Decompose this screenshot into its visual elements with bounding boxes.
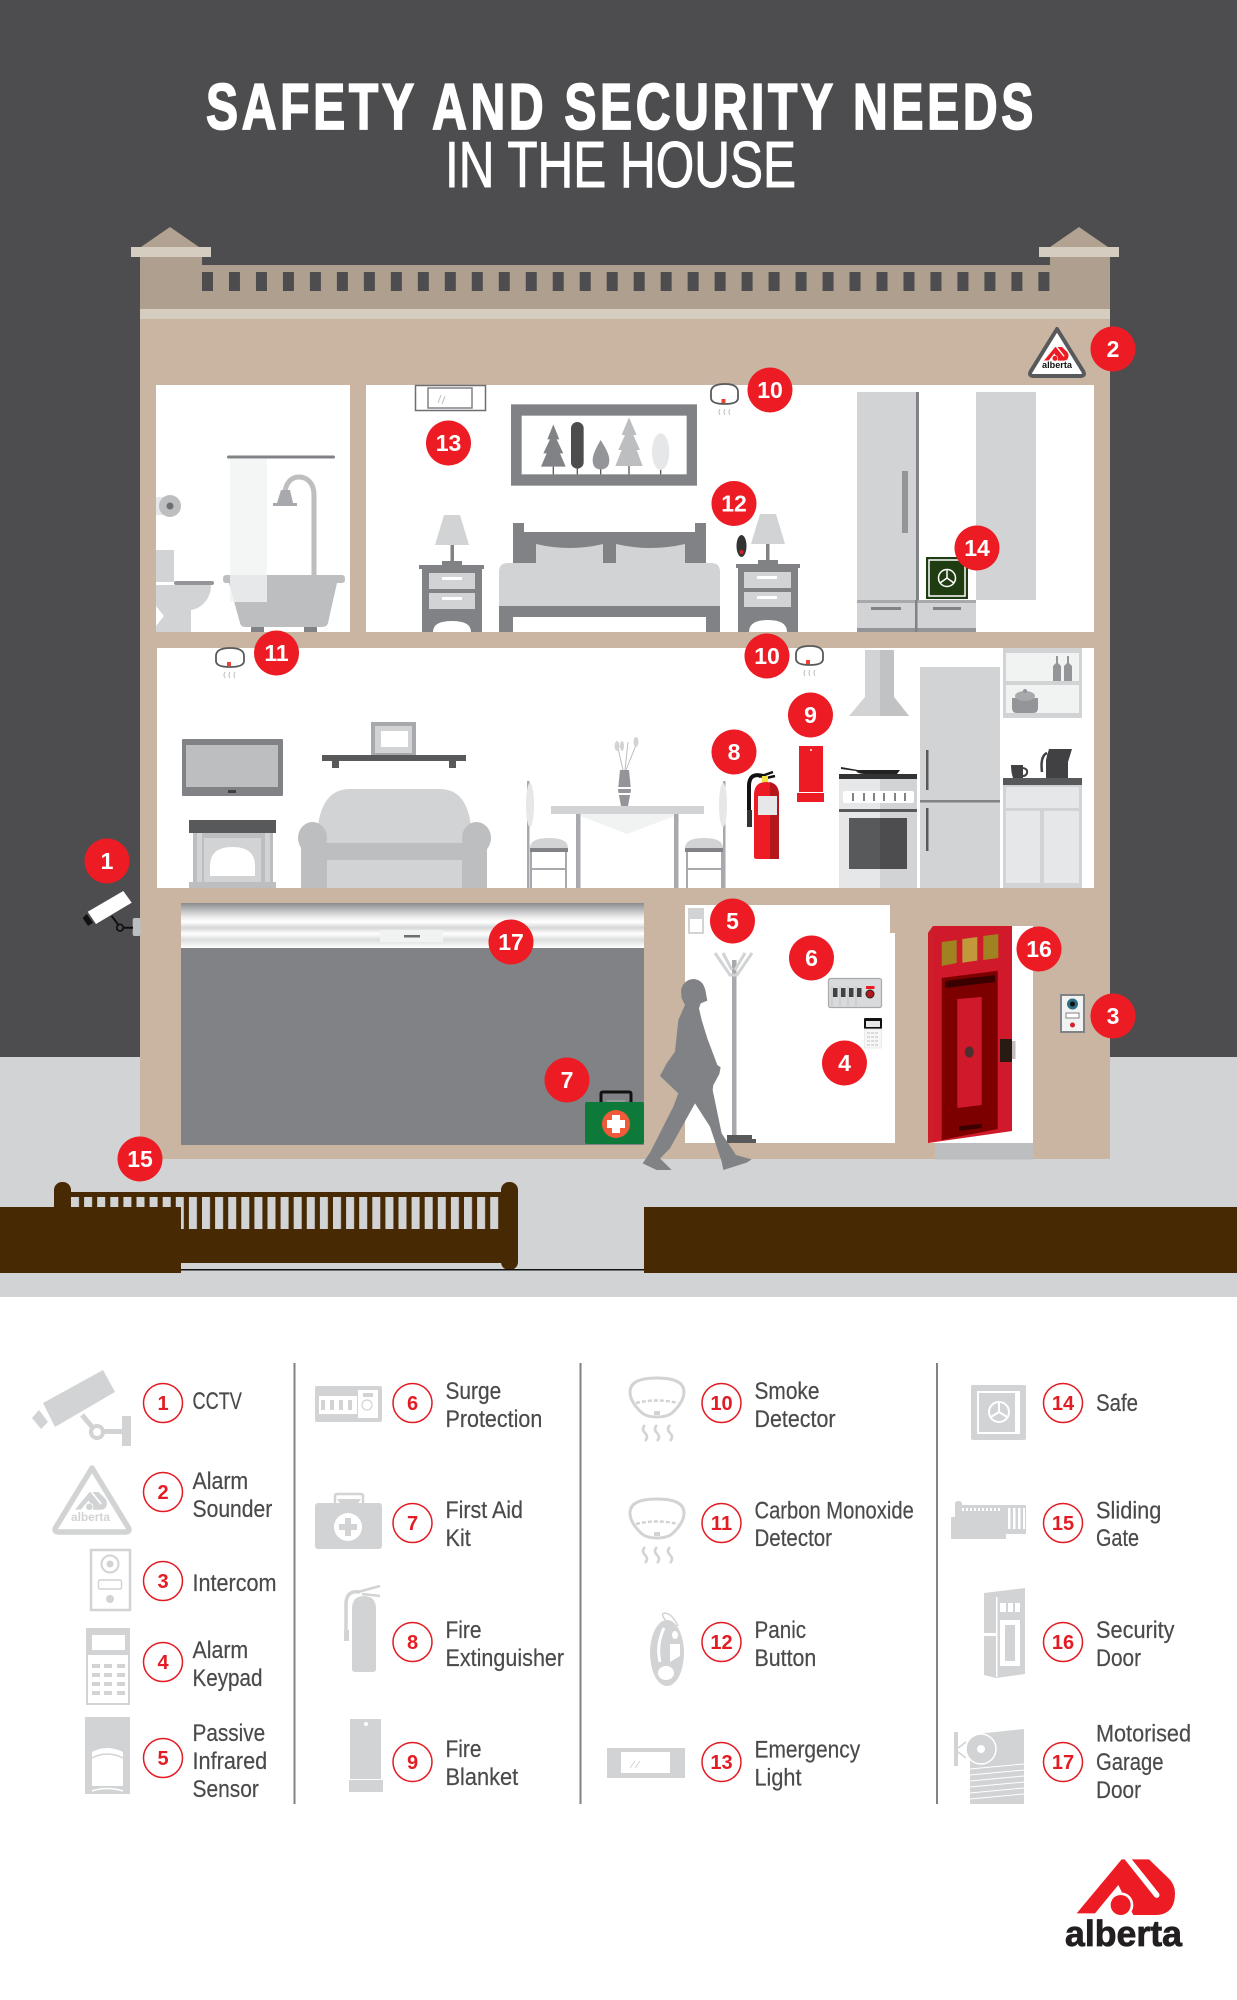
painting <box>511 404 697 486</box>
legend icon: garage door <box>954 1729 1024 1804</box>
legend item 11: Carbon Monoxide Detector: Carbon Monoxide <box>754 1498 914 1524</box>
legend item 17: Motorised Garage Door: Garage <box>1096 1749 1164 1776</box>
icon: toilet <box>156 550 214 632</box>
legend icon: fire blanket <box>349 1719 383 1792</box>
legend icon: smoke detector <box>630 1378 684 1441</box>
dining chair right <box>685 781 727 888</box>
refrigerator <box>920 667 1000 888</box>
panel: living room and kitchen <box>157 646 1094 888</box>
icon: shower <box>273 477 314 576</box>
legend item 13: Emergency Light <box>607 1736 861 1792</box>
icon: surge protection panel <box>828 978 882 1008</box>
legend item 12: Panic Button: 12 <box>710 1632 733 1654</box>
legend icon: PIR sensor <box>85 1717 130 1794</box>
legend icon: panic button <box>650 1613 684 1686</box>
icon: smoke detector living <box>796 646 823 676</box>
icon: security door <box>928 926 1016 1143</box>
legend item 10: Smoke Detector: 10 <box>710 1393 733 1415</box>
legend item 16: Security Door: Security <box>1096 1617 1175 1644</box>
stove and pan <box>839 767 917 888</box>
numbered marker 8 <box>712 730 756 774</box>
numbered marker 10 bedroom: 10 <box>757 377 783 403</box>
icon: safe <box>926 557 968 599</box>
legend item 2: Alarm Sounder <box>55 1468 272 1532</box>
fireplace <box>189 820 276 888</box>
background: ground <box>0 1057 1237 1297</box>
legend item 5: Passive Infrared Sensor: Sensor <box>192 1776 259 1803</box>
icon: emergency light <box>416 386 486 410</box>
numbered marker 14 <box>954 526 1000 570</box>
numbered marker 11 <box>254 630 299 676</box>
icon: bathtub and curtain <box>223 456 345 632</box>
panel: bedroom <box>366 384 1094 632</box>
legend item 11: Carbon Monoxide Detector: Detector <box>754 1525 832 1552</box>
legend item 5: Passive Infrared Sensor: 5 <box>157 1748 169 1770</box>
shelf with photo frame <box>322 722 466 768</box>
legend item 14: Safe: 14 <box>1052 1393 1075 1415</box>
icon: toilet paper <box>156 495 181 517</box>
dining table with vase <box>551 737 704 888</box>
nightstand and lamp left <box>419 515 484 632</box>
legend item 5: Passive Infrared Sensor: Passive <box>192 1720 265 1747</box>
numbered marker 17: 17 <box>498 929 524 955</box>
icon: smoke detector bedroom <box>711 384 738 415</box>
range hood <box>849 650 909 716</box>
numbered marker 10 living room: 10 <box>754 643 780 669</box>
numbered marker 6: 6 <box>805 945 818 971</box>
icon: alarm keypad <box>864 1018 882 1048</box>
legend item 9: Fire Blanket: Fire <box>446 1736 482 1763</box>
legend item 6: Surge Protection: 6 <box>407 1393 418 1415</box>
house structure <box>131 227 1119 1159</box>
numbered marker 8: 8 <box>728 739 741 765</box>
numbered marker 9 <box>788 692 833 738</box>
numbered marker 4 <box>822 1040 867 1086</box>
numbered marker 17 <box>488 920 534 964</box>
legend item 8: Fire Extinguisher: 8 <box>407 1632 418 1654</box>
legend item 7: First Aid Kit <box>315 1494 523 1552</box>
legend item 12: Panic Button: Panic <box>754 1617 806 1644</box>
legend item 4: Alarm Keypad: Alarm <box>192 1637 248 1664</box>
legend item 12: Panic Button: Button <box>754 1645 816 1672</box>
legend item 8: Fire Extinguisher: Fire <box>446 1617 482 1644</box>
wardrobe <box>857 392 1036 632</box>
sofa <box>298 789 491 888</box>
kitchen counter with kettle and mug <box>1003 749 1082 888</box>
icon: first aid kit <box>585 1092 644 1144</box>
legend item 17: Motorised Garage Door: Motorised <box>1096 1720 1191 1748</box>
panel: security door opening <box>928 926 1033 1160</box>
legend icon: emergency light <box>607 1748 685 1778</box>
legend item 10: Smoke Detector <box>630 1378 836 1441</box>
coat rack <box>715 953 756 1143</box>
legend icon: surge protection <box>315 1386 382 1422</box>
nightstand and lamp right <box>736 514 800 632</box>
legend item 3: Intercom: Intercom <box>192 1570 276 1597</box>
legend item 2: Alarm Sounder: Alarm <box>192 1468 248 1495</box>
numbered marker 15 <box>118 1136 162 1182</box>
legend icon: CCTV <box>32 1370 131 1446</box>
numbered marker 2: 2 <box>1107 336 1119 362</box>
icon: fire blanket <box>797 746 824 802</box>
numbered marker 5 <box>710 898 755 944</box>
numbered marker 1: 1 <box>101 848 114 874</box>
legend item 8: Fire Extinguisher <box>344 1586 564 1672</box>
legend item 1: CCTV <box>32 1370 242 1446</box>
numbered marker 6 <box>789 936 834 980</box>
legend item 6: Surge Protection: Protection <box>446 1406 542 1433</box>
numbered marker 3: 3 <box>1107 1003 1119 1029</box>
panel: garage <box>181 903 644 1145</box>
legend item 11: Carbon Monoxide Detector <box>630 1498 914 1563</box>
icon: alarm sounder <box>1030 329 1084 376</box>
numbered marker 9: 9 <box>804 702 817 728</box>
legend item 7: First Aid Kit: First Aid <box>446 1497 523 1524</box>
icon: carbon monoxide detector <box>216 648 244 678</box>
logo: alberta <box>1065 1857 1183 1954</box>
icon: person walking <box>643 979 752 1170</box>
title: IN THE HOUSE <box>445 128 796 201</box>
dining chair left <box>526 781 568 888</box>
legend item 16: Security Door: 16 <box>1052 1632 1074 1654</box>
legend item 10: Smoke Detector: Detector <box>754 1406 836 1433</box>
legend item 12: Panic Button <box>650 1613 816 1686</box>
panel: hallway <box>685 905 895 1143</box>
legend icon: alarm sounder <box>55 1468 129 1532</box>
icon: CCTV camera <box>83 891 141 936</box>
legend icon: alarm sounder: alberta <box>71 1510 110 1524</box>
numbered marker 12 <box>712 481 756 526</box>
numbered marker 13 <box>426 420 471 466</box>
background: dark sky <box>0 0 1237 1057</box>
legend item 13: Emergency Light: Emergency <box>754 1736 861 1764</box>
legend item 4: Alarm Keypad: Keypad <box>192 1665 262 1692</box>
legend item 7: First Aid Kit: 7 <box>407 1513 418 1535</box>
title: SAFETY AND SECURITY NEEDS <box>206 71 1033 144</box>
numbered marker 16: 16 <box>1026 936 1052 962</box>
legend item 10: Smoke Detector: Smoke <box>754 1378 820 1405</box>
legend icon: safe <box>971 1385 1026 1440</box>
kitchen wall cabinet <box>1003 648 1082 718</box>
motorised garage door <box>181 903 644 948</box>
numbered marker 14: 14 <box>964 535 990 561</box>
legend item 4: Alarm Keypad <box>86 1628 262 1705</box>
television <box>182 739 283 796</box>
legend item 5: Passive Infrared Sensor: Infrared <box>192 1748 267 1775</box>
numbered marker 3 <box>1090 994 1136 1038</box>
legend icon: intercom <box>91 1550 130 1610</box>
legend icon: carbon monoxide detector <box>630 1499 684 1563</box>
legend item 17: Motorised Garage Door: Door <box>1096 1777 1141 1804</box>
panel: bathroom <box>156 385 350 632</box>
numbered marker 11: 11 <box>264 640 289 666</box>
legend icon: fire extinguisher <box>344 1586 380 1672</box>
legend item 3: Intercom <box>91 1550 276 1610</box>
legend icon: sliding gate <box>951 1501 1026 1539</box>
logo: alberta: alberta <box>1065 1913 1183 1954</box>
legend column dividers <box>294 1363 938 1804</box>
numbered marker 13: 13 <box>436 430 461 456</box>
numbered marker 12: 12 <box>721 490 747 516</box>
legend item 16: Security Door: Door <box>1096 1645 1141 1672</box>
numbered marker 4: 4 <box>838 1050 851 1076</box>
icon: fire extinguisher <box>747 772 779 859</box>
legend item 6: Surge Protection: Surge <box>446 1378 501 1405</box>
legend item 1: CCTV: 1 <box>157 1393 169 1415</box>
icon: passive infrared sensor <box>688 908 704 934</box>
legend item 15: Sliding Gate: 15 <box>1052 1513 1074 1535</box>
legend item 8: Fire Extinguisher: Extinguisher <box>446 1645 564 1672</box>
legend item 4: Alarm Keypad: 4 <box>157 1652 169 1674</box>
icon: alarm sounder: alberta <box>1042 360 1073 370</box>
legend icon: security door <box>984 1588 1025 1678</box>
legend item 2: Alarm Sounder: Sounder <box>192 1496 272 1523</box>
legend item 17: Motorised Garage Door: 17 <box>1052 1752 1074 1774</box>
numbered marker 16 <box>1016 926 1062 972</box>
numbered marker 5: 5 <box>726 908 739 934</box>
icon: panic button <box>736 535 746 557</box>
legend item 14: Safe <box>971 1384 1138 1440</box>
legend item 1: CCTV: CCTV <box>192 1388 242 1415</box>
numbered marker 1 <box>84 838 130 884</box>
numbered marker 10 bedroom <box>748 368 792 412</box>
legend item 11: Carbon Monoxide Detector: 11 <box>711 1513 732 1535</box>
numbered marker 7 <box>544 1058 590 1102</box>
legend item 6: Surge Protection <box>315 1378 542 1433</box>
bed <box>499 523 720 632</box>
legend item 13: Emergency Light: 13 <box>710 1752 733 1774</box>
legend item 16: Security Door <box>984 1588 1175 1678</box>
legend icon: keypad <box>86 1628 130 1705</box>
numbered marker 10 living room <box>744 634 790 678</box>
legend item 15: Sliding Gate: Sliding <box>1096 1498 1161 1524</box>
numbered marker 7: 7 <box>561 1067 573 1093</box>
numbered marker 15: 15 <box>127 1146 153 1172</box>
title <box>206 71 1033 201</box>
legend item 7: First Aid Kit: Kit <box>446 1525 471 1552</box>
legend item 9: Fire Blanket: Blanket <box>446 1764 518 1791</box>
legend item 9: Fire Blanket: 9 <box>407 1752 418 1774</box>
legend item 15: Sliding Gate <box>951 1498 1161 1552</box>
icon: intercom <box>1061 995 1084 1032</box>
numbered marker 2 <box>1090 326 1136 372</box>
legend item 17: Motorised Garage Door <box>954 1720 1191 1804</box>
legend item 5: Passive Infrared Sensor <box>85 1717 267 1803</box>
sliding gate and wall <box>0 1182 1237 1273</box>
legend icon: first aid kit <box>315 1494 382 1549</box>
legend item 13: Emergency Light: Light <box>754 1765 802 1792</box>
legend item 3: Intercom: 3 <box>157 1571 169 1593</box>
legend item 2: Alarm Sounder: 2 <box>157 1482 169 1504</box>
legend item 14: Safe: Safe <box>1096 1390 1138 1417</box>
legend item 9: Fire Blanket <box>349 1719 518 1792</box>
legend item 15: Sliding Gate: Gate <box>1096 1525 1139 1552</box>
